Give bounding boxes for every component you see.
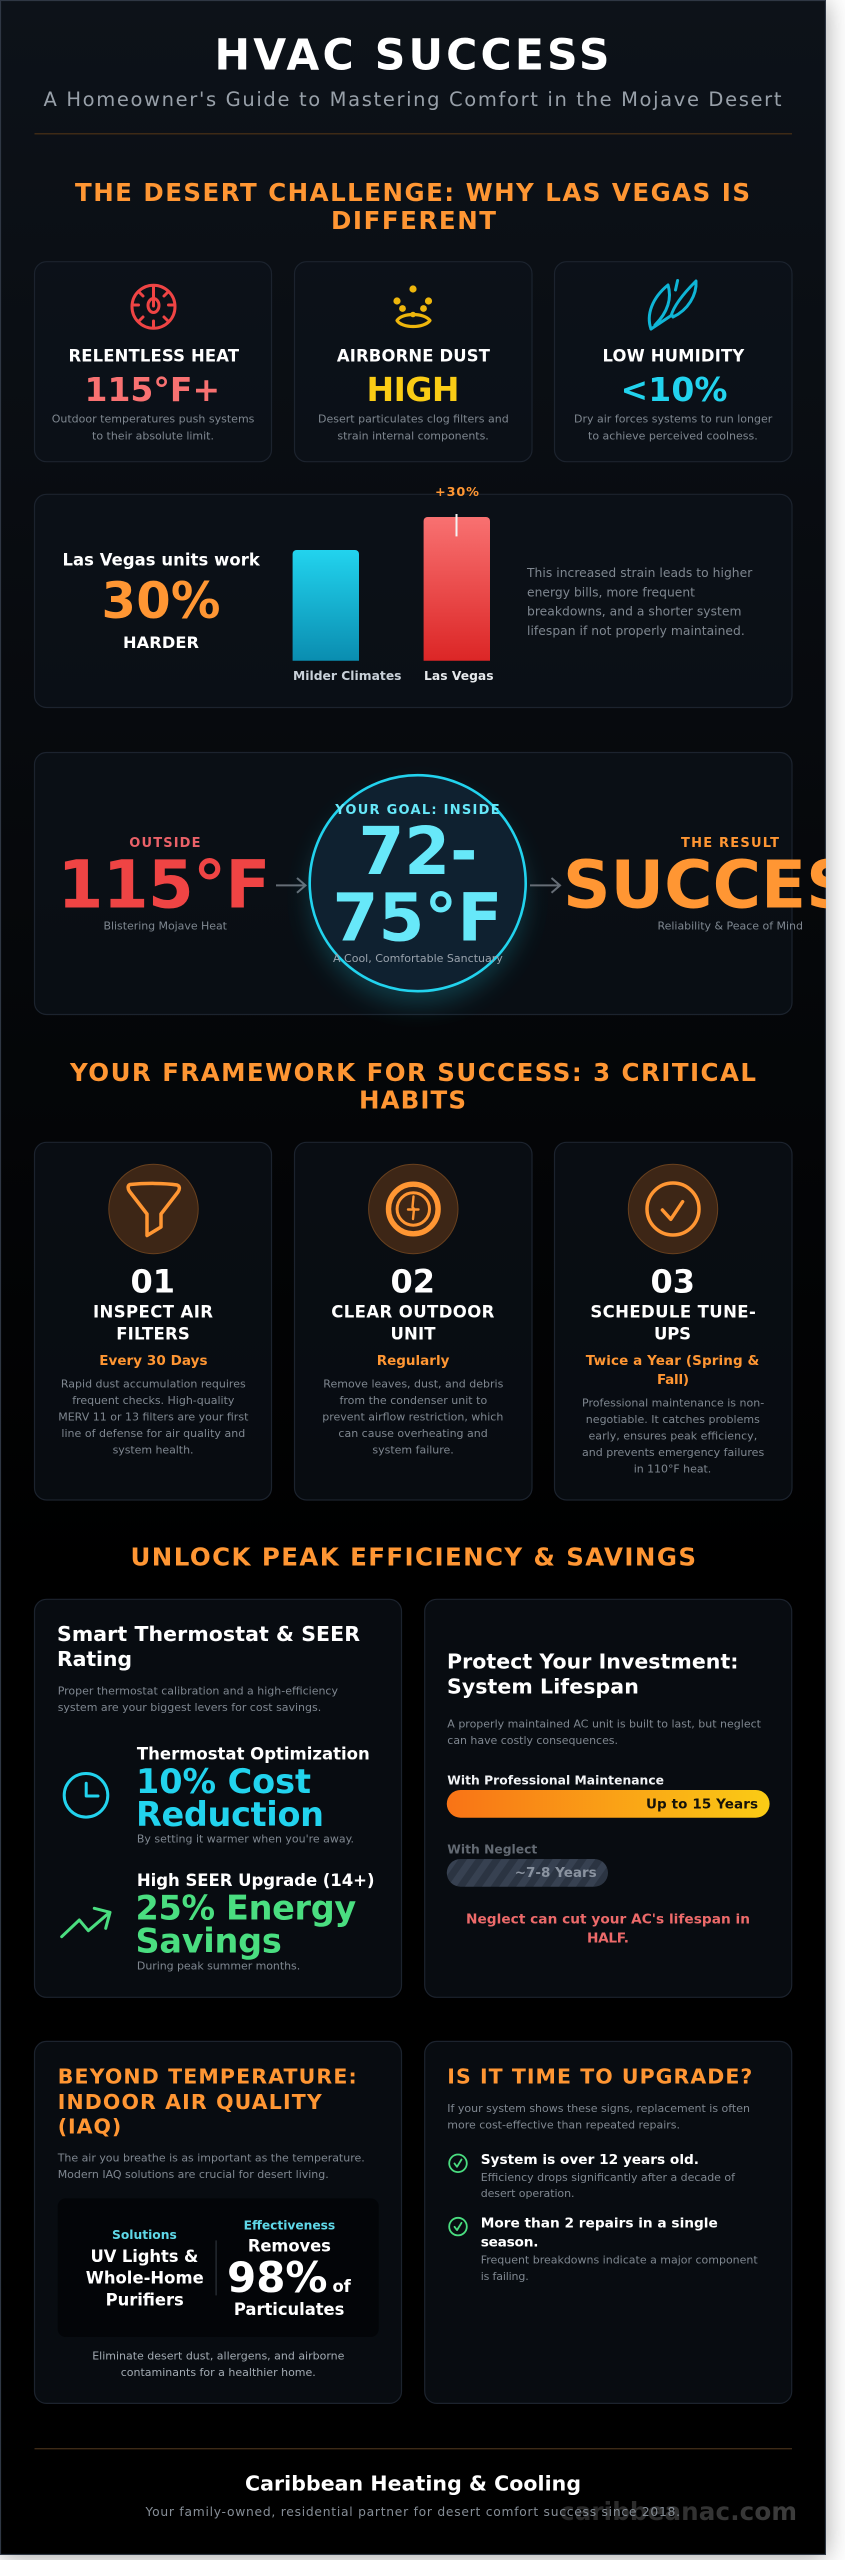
description: to achieve perceived coolness.	[588, 429, 758, 442]
panel: habit 01	[34, 1142, 272, 1500]
goal circle: 75°F	[332, 879, 502, 956]
watermark: caribbeanac.com	[560, 2497, 797, 2526]
stat: 115°F+	[84, 370, 220, 409]
effectiveness	[227, 2218, 352, 2319]
panel: habit 03	[554, 1142, 792, 1500]
description	[447, 1717, 762, 1747]
effectiveness: 98%	[227, 2253, 328, 2302]
panel heading	[447, 1649, 738, 1698]
description: If your system shows these signs, replacement is often	[447, 2102, 750, 2115]
description: can cause overheating and	[338, 1427, 488, 1440]
effectiveness: of	[332, 2277, 352, 2296]
label: LOW HUMIDITY	[602, 347, 745, 366]
bar: with maintenance: Up to 15 Years	[646, 1796, 758, 1812]
frequency: Twice a Year (Spring &	[586, 1353, 760, 1369]
stat: thermostat: Thermostat Optimization	[137, 1744, 370, 1763]
panel heading: BEYOND TEMPERATURE:	[58, 2065, 357, 2089]
stat: <10%	[620, 370, 728, 409]
habit title	[590, 1303, 756, 1344]
sign 1: Efficiency drops significantly after a decade of	[481, 2171, 736, 2184]
sign 2: season.	[481, 2235, 538, 2251]
description: to their absolute limit.	[92, 429, 214, 442]
warning: HALF.	[587, 1930, 629, 1946]
description: system failure.	[372, 1443, 454, 1456]
description: prevent airflow restriction, which	[322, 1410, 503, 1423]
icon: gauge	[132, 285, 175, 328]
bar: with maintenance	[447, 1773, 770, 1818]
description: Rapid dust accumulation requires	[61, 1377, 246, 1390]
panel: smart thermostat	[34, 1599, 402, 1997]
panel: time to upgrade	[425, 2041, 792, 2403]
heading: framework: YOUR FRAMEWORK FOR SUCCESS: 3 CRITICAL	[69, 1058, 756, 1087]
description: Professional maintenance is non-	[582, 1396, 764, 1409]
description: strain internal components.	[337, 429, 489, 442]
solutions	[86, 2228, 204, 2310]
effectiveness: Particulates	[234, 2300, 344, 2319]
panel: system lifespan	[425, 1599, 792, 1997]
text block	[526, 566, 753, 638]
stat: thermostat: 10% Cost	[136, 1762, 311, 1801]
icon: funnel	[109, 1164, 198, 1254]
bar chart: +30%	[435, 485, 479, 500]
footer	[144, 2471, 797, 2526]
outside stat: 115°F	[58, 846, 270, 924]
bar: with neglect: With Neglect	[447, 1842, 537, 1856]
stat: thermostat: By setting it warmer when you're away.	[137, 1833, 354, 1846]
description: Outdoor temperatures push systems	[52, 413, 255, 426]
panel heading	[57, 1622, 360, 1671]
label: RELENTLESS HEAT	[68, 347, 240, 366]
description: can have costly consequences.	[447, 1734, 618, 1747]
icon: condenser	[369, 1164, 458, 1254]
text block: breakdowns, and a shorter system	[527, 605, 742, 619]
description	[322, 1377, 504, 1456]
sign 2: Frequent breakdowns indicate a major component	[481, 2254, 758, 2266]
stat: HIGH	[366, 370, 460, 409]
description: in 110°F heat.	[634, 1462, 711, 1476]
icon: dust	[393, 285, 432, 326]
outside stat: OUTSIDE	[129, 836, 200, 851]
sign 2	[481, 2215, 758, 2283]
solutions: Whole-Home	[86, 2268, 204, 2288]
panel: 30 percent harder	[34, 485, 792, 708]
stat: seer: 25% Energy	[136, 1888, 356, 1927]
habit title: FILTERS	[116, 1325, 190, 1344]
stat: thermostat: Reduction	[136, 1795, 324, 1834]
heading: framework	[69, 1058, 756, 1115]
description: frequent checks. High-quality	[72, 1394, 235, 1407]
description: more cost-effective than repeated repairs.	[447, 2118, 680, 2132]
icon: trend up	[62, 1908, 110, 1937]
frequency	[586, 1353, 760, 1388]
frequency: Every 30 Days	[99, 1353, 208, 1369]
closing note: contaminants for a healthier home.	[121, 2366, 316, 2379]
description	[58, 1684, 338, 1714]
bar chart: Las Vegas	[424, 669, 494, 683]
solutions: Solutions	[112, 2228, 177, 2242]
habit title	[331, 1303, 495, 1344]
description: The air you breathe is as important as the temperature.	[57, 2151, 365, 2164]
result stat: Reliability & Peace of Mind	[658, 919, 803, 932]
callout: 30% harder	[62, 551, 261, 652]
heading: desert challenge: DIFFERENT	[331, 206, 496, 235]
description: system are your biggest levers for cost savings.	[58, 1701, 321, 1714]
description: and prevents emergency failures	[582, 1446, 764, 1459]
bar: with neglect: ~7-8 Years	[515, 1865, 597, 1881]
sign 1: System is over 12 years old.	[481, 2152, 699, 2168]
closing note	[92, 2350, 345, 2379]
stat: seer	[136, 1871, 374, 1972]
bar: with neglect	[447, 1842, 608, 1887]
effectiveness: Effectiveness	[244, 2218, 335, 2232]
description: A properly maintained AC unit is built to last, but neglect	[447, 1717, 762, 1730]
number: 03	[650, 1263, 695, 1301]
stat: thermostat	[136, 1744, 370, 1846]
habit title: SCHEDULE TUNE-	[590, 1303, 756, 1322]
label: AIRBORNE DUST	[337, 347, 491, 366]
stat: seer: High SEER Upgrade (14+)	[137, 1871, 374, 1890]
text block: energy bills, more frequent	[527, 585, 695, 599]
callout: 30% harder: HARDER	[123, 633, 200, 652]
description: line of defense for air quality and	[61, 1427, 245, 1440]
habit title: UPS	[654, 1325, 691, 1344]
description: MERV 11 or 13 filters are your first	[58, 1410, 249, 1423]
description: negotiable. It catches problems	[586, 1413, 760, 1426]
panel: temperature flow	[34, 752, 845, 1014]
goal circle	[310, 775, 526, 1003]
description	[574, 413, 773, 442]
sign 2: is failing.	[481, 2270, 529, 2283]
inner box	[58, 2198, 379, 2337]
description	[52, 413, 255, 442]
description: from the condenser unit to	[340, 1394, 487, 1407]
description	[318, 413, 509, 442]
panel heading	[58, 2065, 357, 2139]
callout: 30% harder: Las Vegas units work	[62, 551, 261, 570]
heading: efficiency: UNLOCK PEAK EFFICIENCY & SAVINGS	[130, 1543, 696, 1572]
goal circle: A Cool, Comfortable Sanctuary	[333, 952, 503, 965]
panel: habit 02	[294, 1142, 532, 1500]
description	[57, 2151, 365, 2181]
description: early, ensures peak efficiency,	[588, 1430, 757, 1442]
title: HVAC SUCCESS	[214, 32, 610, 80]
sign 1: desert operation.	[481, 2187, 574, 2200]
warning	[466, 1911, 750, 1946]
panel: low humidity	[554, 262, 792, 462]
description: Dry air forces systems to run longer	[574, 413, 773, 426]
callout: 30% harder: 30%	[102, 572, 220, 630]
header	[44, 32, 782, 111]
stat: seer: Savings	[136, 1921, 282, 1960]
solutions: UV Lights &	[90, 2247, 198, 2266]
description: system health.	[113, 1443, 194, 1456]
icon: feather	[649, 280, 696, 329]
icon: check	[449, 2218, 467, 2235]
number: 02	[390, 1263, 435, 1301]
company name: Caribbean Heating & Cooling	[245, 2471, 581, 2495]
description: Remove leaves, dust, and debris	[323, 1377, 504, 1390]
panel heading: IS IT TIME TO UPGRADE?	[447, 2065, 752, 2089]
heading: framework: HABITS	[359, 1086, 466, 1115]
outside stat: Blistering Mojave Heat	[104, 919, 228, 932]
bar chart: Milder Climates	[293, 669, 402, 683]
panel heading: Rating	[57, 1647, 132, 1671]
panel heading: (IAQ)	[58, 2115, 121, 2139]
sign 1	[481, 2152, 736, 2200]
description	[58, 1377, 249, 1456]
panel heading: Smart Thermostat & SEER	[57, 1622, 360, 1646]
panel heading: System Lifespan	[447, 1674, 639, 1698]
habit title: INSPECT AIR	[93, 1303, 213, 1322]
description: Modern IAQ solutions are crucial for desert living.	[58, 2168, 329, 2181]
text block: lifespan if not properly maintained.	[527, 624, 745, 638]
number: 01	[130, 1263, 175, 1301]
panel: airborne dust	[294, 262, 532, 462]
habit title: CLEAR OUTDOOR	[331, 1303, 495, 1322]
stat: seer: During peak summer months.	[137, 1959, 300, 1972]
panel: indoor air quality	[34, 2041, 402, 2403]
frequency: Fall)	[657, 1372, 689, 1388]
habit title: UNIT	[390, 1325, 436, 1344]
icon: check	[449, 2154, 467, 2172]
bar chart	[293, 485, 494, 683]
sign 2: More than 2 repairs in a single	[481, 2215, 718, 2231]
frequency: Regularly	[377, 1353, 450, 1369]
panel heading: INDOOR AIR QUALITY	[58, 2090, 323, 2114]
closing note: Eliminate desert dust, allergens, and airborne	[92, 2350, 345, 2363]
goal circle: 72-	[358, 813, 478, 890]
description: Desert particulates clog filters and	[318, 413, 509, 426]
heading: desert challenge	[75, 178, 750, 235]
effectiveness: Removes	[248, 2236, 331, 2255]
subtitle: A Homeowner's Guide to Mastering Comfort in the Mojave Desert	[44, 88, 782, 111]
goal circle: YOUR GOAL: INSIDE	[334, 803, 500, 818]
habit title	[93, 1303, 213, 1344]
panel: relentless heat	[34, 262, 272, 462]
description: Proper thermostat calibration and a high-efficiency	[58, 1684, 338, 1697]
icon: check circle	[628, 1164, 718, 1254]
warning: Neglect can cut your AC's lifespan in	[466, 1911, 750, 1927]
panel heading: Protect Your Investment:	[447, 1649, 738, 1673]
solutions: Purifiers	[106, 2290, 184, 2310]
description	[447, 2102, 750, 2132]
heading: desert challenge: THE DESERT CHALLENGE: WHY LAS VEGAS IS	[75, 178, 750, 207]
result stat: THE RESULT	[681, 836, 779, 851]
arrow	[530, 878, 560, 893]
arrow	[276, 878, 306, 893]
text block: This increased strain leads to higher	[526, 566, 753, 580]
tagline: Your family-owned, residential partner for desert comfort success since 2018.	[144, 2505, 680, 2519]
description	[582, 1396, 764, 1476]
bar: with maintenance: With Professional Maintenance	[447, 1773, 664, 1787]
icon: clock	[64, 1774, 108, 1817]
